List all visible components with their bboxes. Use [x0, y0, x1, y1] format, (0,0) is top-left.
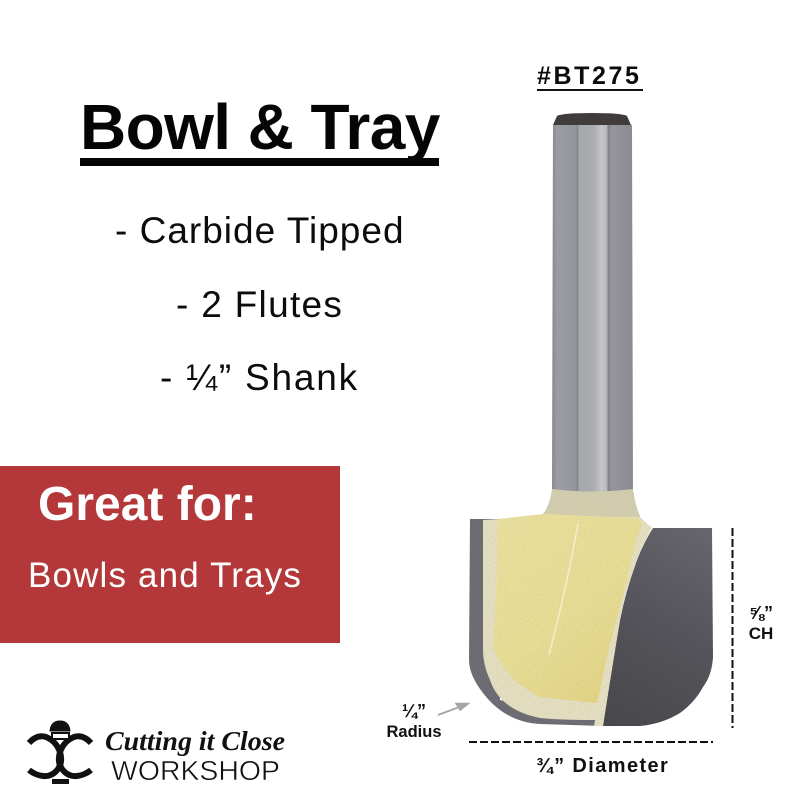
hard hat: [50, 721, 70, 731]
feature: carbide tipped: - Carbide Tipped: [115, 210, 405, 251]
yellow body: [493, 514, 642, 703]
label: diameter: ¾” Diameter: [536, 755, 669, 777]
feature: shank: - ¼” Shank: [160, 357, 359, 398]
router bit: [469, 113, 713, 726]
label: radius: ¼”: [402, 701, 426, 721]
label: chamfer height: ⅝”: [749, 603, 773, 623]
label: radius: Radius: [386, 723, 442, 741]
shank: [552, 125, 633, 492]
logo icon: [29, 721, 91, 784]
left carbide wing: [469, 519, 603, 726]
product code: #BT275: [537, 62, 642, 90]
feature: flutes: - 2 Flutes: [176, 284, 343, 325]
goggles: [52, 733, 69, 739]
label: chamfer height: CH: [749, 624, 773, 643]
shank tip: [553, 113, 631, 125]
logo script text: Cutting it Close: [105, 726, 285, 756]
dimension: height: [732, 528, 734, 728]
title: Bowl & Tray: [80, 91, 440, 163]
panel text: Bowls and Trays: [28, 556, 302, 595]
highlight: [549, 524, 578, 655]
dimension: diameter: [469, 741, 713, 743]
braze collar: [543, 489, 640, 530]
boot: [52, 779, 69, 784]
right carbide wing: [603, 528, 713, 726]
brazed edge: [483, 517, 652, 726]
radius arrow: [438, 703, 470, 715]
panel: great for: [0, 466, 340, 643]
logo workshop text: WORKSHOP: [111, 755, 280, 786]
panel heading: Great for:: [38, 478, 257, 531]
